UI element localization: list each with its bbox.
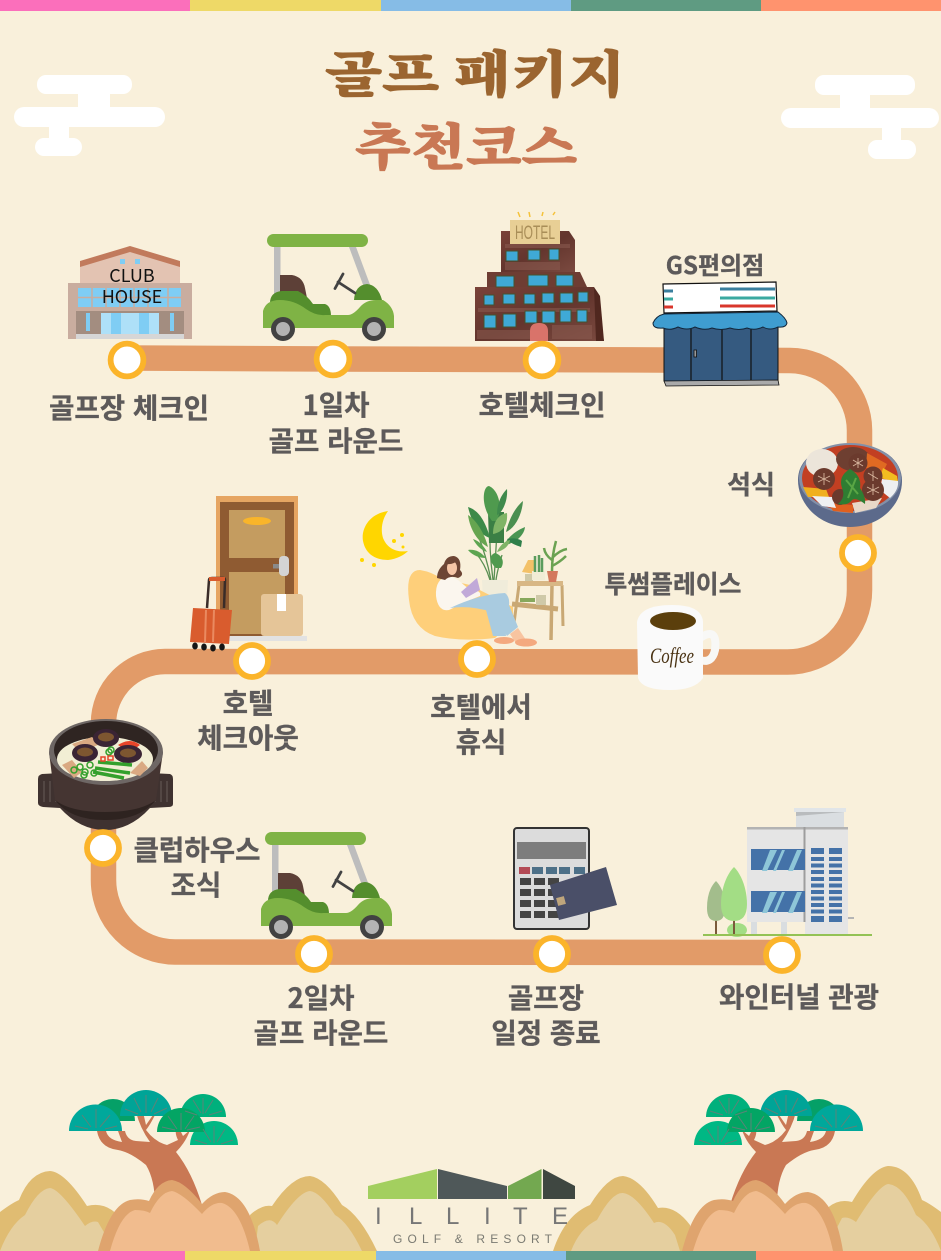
foreground mountain left <box>98 1180 260 1251</box>
label: hotel check-in: 호텔체크인 <box>479 383 605 423</box>
icon: hotel <box>475 212 604 341</box>
logo: ILLITE Golf & Resort: ILLITE <box>375 1203 568 1230</box>
label: golf course check-in: 골프장 체크인 <box>49 386 209 426</box>
icon: hotel: HOTEL <box>515 223 555 244</box>
label: golf schedule end: 골프장 <box>508 976 584 1016</box>
label: clubhouse breakfast: 클럽하우스 <box>134 828 260 868</box>
icon: coffee mug: Coffee <box>650 643 694 668</box>
label: golf schedule end: 일정 종료 <box>491 1011 601 1051</box>
icon: moon and stars <box>360 511 408 567</box>
icon: bibimbap bowl <box>798 443 902 527</box>
label: hotel check-out <box>197 681 299 756</box>
icon: wine tunnel building with trees <box>703 808 872 937</box>
label: day 2 golf round <box>254 976 388 1051</box>
title line 1: 골프 패키지 <box>325 47 625 103</box>
top colour bar <box>0 0 941 11</box>
label: day 1 golf round <box>269 383 403 459</box>
logo: ILLITE Golf & Resort <box>368 1169 575 1246</box>
label: hotel check-out: 체크아웃 <box>197 716 299 756</box>
label: rest at hotel: 휴식 <box>456 720 506 760</box>
cloud right <box>781 75 939 159</box>
icon: golf cart 2 <box>261 832 392 939</box>
label: day 1 golf round: 1일차 <box>302 383 370 423</box>
route road <box>104 358 860 952</box>
title line 2: 추천코스 <box>355 120 577 176</box>
icon: GS convenience store <box>653 282 787 386</box>
icon: stone pot gukbap <box>38 719 173 830</box>
cloud left <box>14 75 165 156</box>
foreground mountain right <box>682 1180 843 1251</box>
icon: coffee mug <box>637 605 715 690</box>
label: rest at hotel: 호텔에서 <box>430 685 532 725</box>
icon: woman reading on bean bag with plants <box>408 486 567 646</box>
label: golf schedule end <box>491 976 601 1051</box>
label: wine tunnel sightseeing: 와인터널 관광 <box>719 975 879 1015</box>
label: day 1 golf round: 골프 라운드 <box>269 419 403 459</box>
icon: club house: CLUB <box>109 262 155 288</box>
label: GS convenience store: GS편의점 <box>666 246 764 281</box>
label: rest at hotel <box>430 685 532 760</box>
pine tree left <box>69 1090 238 1205</box>
label: dinner: 석식 <box>727 465 775 502</box>
label: Twosome Place: 투썸플레이스 <box>605 565 741 601</box>
icon: hotel door with luggage <box>190 496 307 652</box>
icon: calculator and card <box>514 828 617 929</box>
label: day 2 golf round: 2일차 <box>287 976 355 1016</box>
icon: club house <box>68 246 192 339</box>
label: day 2 golf round: 골프 라운드 <box>254 1011 388 1051</box>
label: hotel check-out: 호텔 <box>223 681 273 721</box>
route stops <box>87 343 874 971</box>
title <box>325 47 625 176</box>
label: clubhouse breakfast: 조식 <box>171 863 221 903</box>
logo: ILLITE Golf & Resort: GOLF & RESORT <box>393 1232 553 1246</box>
back mountains right <box>553 1166 941 1251</box>
pine tree right <box>694 1090 863 1205</box>
bottom colour bar <box>0 1251 941 1260</box>
icon: club house: HOUSE <box>102 283 162 309</box>
icon: golf cart 1 <box>263 234 394 341</box>
back mountains left <box>0 1171 377 1251</box>
label: clubhouse breakfast <box>134 828 260 903</box>
